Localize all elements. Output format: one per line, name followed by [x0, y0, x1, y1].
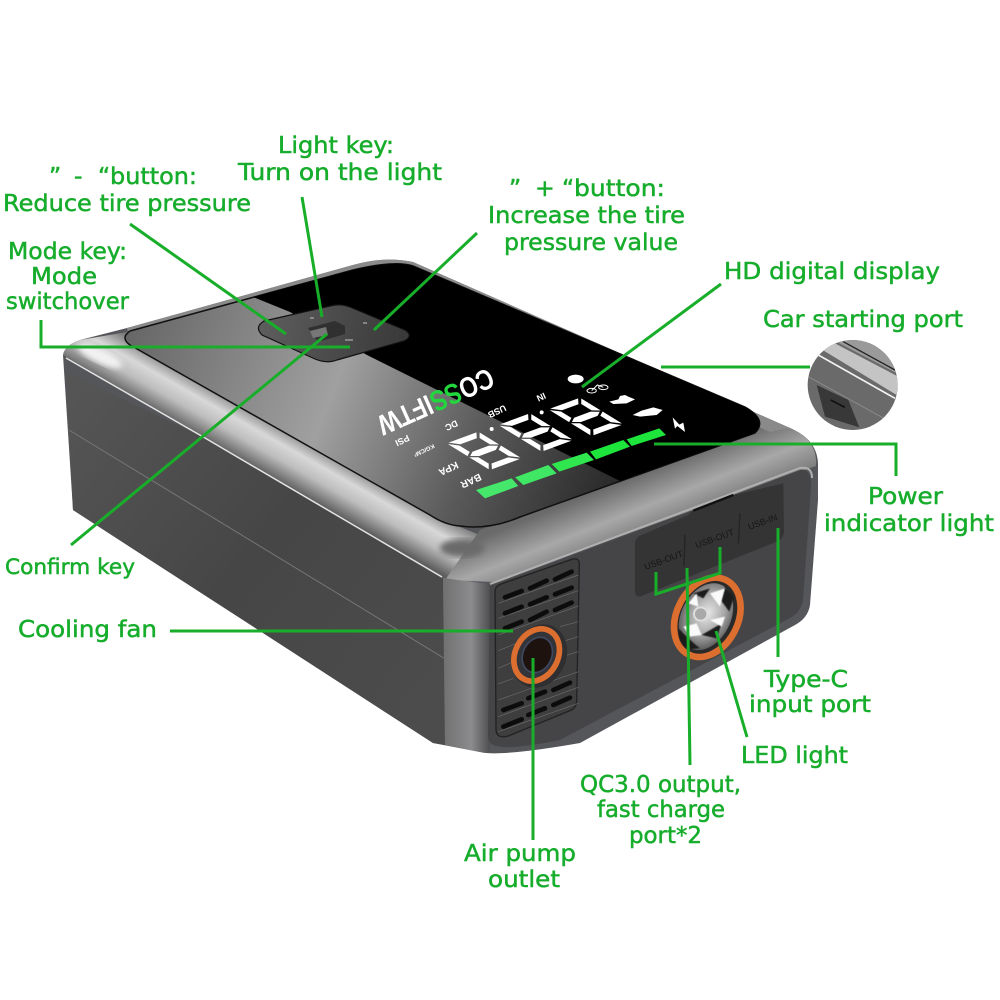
power bar 3	[552, 453, 594, 472]
brand logo COSSIFTW: COSSIFTW	[372, 361, 498, 441]
label: minus button: button:	[110, 162, 197, 190]
label: plus button: +	[535, 174, 555, 202]
cover dividers	[684, 513, 740, 567]
long side face	[66, 372, 445, 745]
leader: QC3.0 output	[687, 568, 690, 765]
power indicator bars	[476, 428, 666, 498]
outlet shadow	[501, 615, 577, 697]
product: air pump and jump starter device	[3, 131, 994, 893]
label: minus button: Reduce tire pressure	[3, 189, 251, 217]
label: minus button	[3, 162, 251, 217]
icon: bicycle	[587, 385, 608, 393]
label: QC3.0 output	[580, 770, 741, 849]
icon: car	[633, 407, 663, 417]
port label USB: USB	[486, 403, 508, 420]
decimal point 1	[490, 427, 494, 431]
inset USB symbol	[831, 400, 845, 407]
leader: USB bracket	[656, 547, 720, 594]
label: air pump outlet	[464, 839, 576, 893]
side seam line	[69, 430, 490, 660]
air pump outlet	[501, 615, 577, 697]
label: air pump outlet: outlet	[488, 865, 560, 893]
label: minus button: ”	[49, 162, 61, 190]
label: power indicator: Power	[868, 482, 943, 510]
leader: power indicator	[654, 444, 896, 476]
LED light	[661, 566, 754, 668]
LED dark reflections	[679, 587, 734, 649]
label: light key	[237, 131, 442, 186]
power bar 1	[476, 478, 518, 498]
bezel highlight line	[66, 358, 442, 577]
inset white line	[818, 355, 895, 398]
power bar 5	[627, 428, 666, 446]
label: QC3.0 output: QC3.0 output,	[580, 770, 741, 798]
leader: air pump outlet	[532, 658, 534, 840]
label: mode key	[6, 237, 129, 315]
unit label PSI: PSI	[394, 433, 411, 448]
leader lines	[41, 197, 896, 840]
inset bright band	[820, 343, 898, 395]
label: power indicator: indicator light	[824, 509, 994, 537]
leader: Type-C	[776, 528, 780, 657]
device body silhouette	[63, 260, 818, 753]
outlet inner ring	[517, 632, 558, 678]
label USB-IN: USB-IN	[747, 512, 779, 532]
front face highlight	[490, 468, 812, 584]
bezel highlight glow	[75, 340, 125, 372]
inset top surface	[838, 340, 896, 373]
leader: confirm key	[71, 334, 327, 545]
keypad button highlight	[310, 327, 328, 338]
label: Type-C port: input port	[749, 690, 871, 718]
digit 1	[447, 432, 522, 470]
labels	[3, 131, 994, 893]
leader: plus button	[374, 233, 477, 330]
bezel back edge	[127, 260, 790, 432]
glass grey area	[125, 264, 760, 527]
vent slots	[503, 572, 572, 727]
keypad	[258, 305, 409, 362]
inset disc	[807, 338, 900, 432]
display graphics	[372, 361, 685, 498]
label: car starting port: Car starting port	[763, 305, 963, 333]
label: light key: Light key:	[278, 131, 394, 159]
port label DC: DC	[443, 418, 459, 433]
cover top slot	[693, 495, 733, 511]
icon: motorbike	[609, 395, 635, 404]
keypad markers	[310, 318, 367, 340]
LED reflector	[668, 574, 744, 659]
keypad centre button	[308, 321, 345, 342]
leader: car starting port	[661, 366, 810, 368]
front face	[488, 470, 811, 747]
front corner strip	[443, 578, 490, 752]
inset background	[807, 338, 900, 432]
bezel corner shadow	[440, 539, 484, 557]
icon: lightning bolt	[673, 417, 685, 432]
indicator dot	[568, 375, 584, 383]
label: plus button: pressure value	[504, 228, 678, 256]
label: plus button: “	[562, 174, 574, 202]
leader: light key	[302, 197, 322, 317]
LED orange ring	[661, 566, 754, 668]
leader: minus button	[130, 224, 286, 334]
unit label BAR: BAR	[458, 471, 483, 490]
label: QC3.0 output: port*2	[629, 821, 702, 849]
inset lower seam	[808, 376, 884, 418]
silver bezel, long edge	[63, 332, 480, 580]
label: mode key: Mode	[31, 262, 97, 290]
label USB-OUT left: USB-OUT	[643, 548, 685, 572]
top glass panel	[125, 264, 760, 527]
label: light key: Turn on the light	[237, 158, 442, 186]
LED white petals	[683, 588, 725, 637]
LED centre bulb	[694, 607, 707, 621]
decimal point 2	[540, 410, 544, 414]
power bar 2	[515, 465, 557, 485]
glass black area	[253, 264, 760, 481]
label: air pump outlet: Air pump	[464, 839, 576, 867]
label: LED light: LED light	[741, 741, 848, 769]
leader: HD display	[582, 284, 721, 387]
label: Type-C port	[749, 665, 871, 718]
label: plus button: Increase the tire	[488, 201, 685, 229]
vent panel	[495, 559, 579, 737]
power bar 4	[590, 440, 630, 459]
inset: car starting port	[807, 338, 900, 432]
silver bezel, front edge	[445, 425, 816, 582]
leader: mode key	[41, 320, 350, 347]
label: minus button: -	[74, 162, 82, 190]
outlet orange ring	[505, 621, 568, 689]
label: minus button: “	[98, 162, 110, 190]
inset port cover	[817, 385, 859, 427]
vent ribs	[498, 575, 578, 732]
digit 3	[548, 398, 623, 436]
label: QC3.0 output: fast charge	[597, 795, 725, 823]
front face details	[495, 483, 784, 737]
USB port cover	[635, 483, 784, 597]
leader: cooling fan	[170, 630, 513, 632]
label: Type-C port: Type-C	[763, 665, 848, 693]
label: plus button: button:	[574, 174, 665, 202]
label: mode key: Mode key:	[8, 237, 127, 265]
label: mode key: switchover	[6, 287, 129, 315]
port label IN: IN	[535, 391, 547, 403]
unit label KG/CM2: KG/CM²	[413, 442, 435, 458]
label: cooling fan: Cooling fan	[18, 615, 157, 643]
inset black seam	[843, 342, 895, 370]
label USB-OUT right: USB-OUT	[694, 527, 736, 550]
leader: LED light	[716, 631, 747, 737]
label: HD display: HD digital display	[724, 257, 940, 285]
unit label KPA: KPA	[437, 459, 460, 477]
label: power indicator	[824, 482, 994, 537]
label: plus button: ”	[509, 174, 521, 202]
digit 2	[498, 413, 573, 452]
label: plus button	[488, 174, 685, 256]
label: confirm key: Confirm key	[5, 555, 135, 580]
